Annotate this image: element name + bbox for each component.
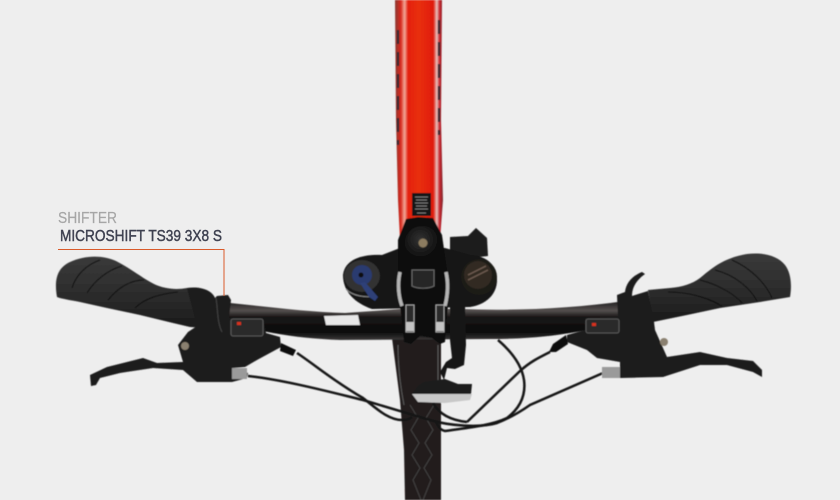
callout label: component type: SHIFTER [58, 210, 117, 227]
front reflector [412, 379, 472, 403]
red frame tube [395, 0, 443, 240]
fork crown [343, 248, 497, 309]
frame sticker [412, 193, 431, 216]
brake caliper behind crown [450, 228, 488, 258]
callout: shifter [58, 210, 224, 296]
front tyre [392, 338, 441, 500]
callout leader line [58, 250, 224, 296]
reflector bracket [440, 304, 466, 380]
brake and shift cables [248, 340, 603, 431]
callout label: component model: MICROSHIFT TS39 3X8 S [60, 228, 222, 245]
right shifter and brake assembly [549, 272, 762, 378]
right grip [648, 253, 791, 322]
right fork pod with dial [461, 259, 497, 295]
stem and clamp [398, 217, 448, 344]
left fork pod with blue lockout lever [344, 260, 380, 301]
handlebar [212, 298, 630, 340]
handlebar highlight [324, 315, 360, 325]
left grip [56, 257, 207, 328]
left shifter and brake assembly [90, 287, 296, 386]
